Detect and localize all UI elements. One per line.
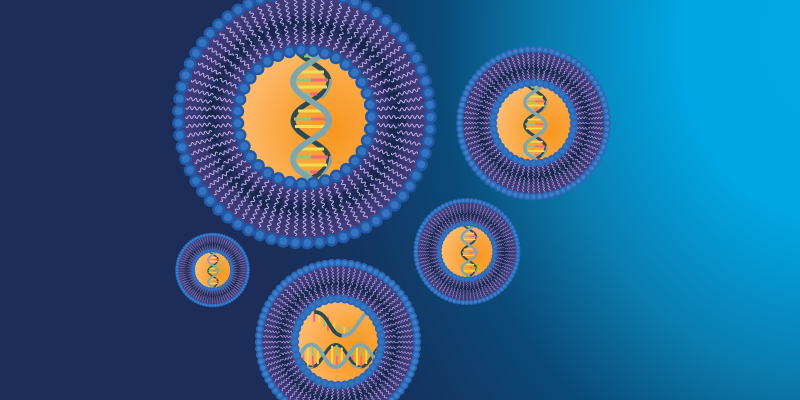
lipid head beads <box>460 49 607 197</box>
single-strand RNA <box>314 312 366 336</box>
vesicle: small left with DNA <box>177 234 248 306</box>
DNA double helix <box>462 221 477 285</box>
lipid bilayer and orange core <box>261 265 415 400</box>
lipid head beads <box>259 263 417 400</box>
lipid bilayer and orange core <box>178 236 247 304</box>
DNA double helix <box>293 42 330 198</box>
vesicle: middle right with DNA <box>416 200 518 303</box>
lipid bilayer and orange core <box>182 0 427 239</box>
vesicle: upper right with DNA <box>460 49 607 197</box>
vesicle: bottom with horizontal DNA and single strand <box>259 263 417 400</box>
horizontal DNA double helix <box>300 342 377 369</box>
DNA double helix <box>208 249 219 293</box>
DNA double helix <box>525 79 547 171</box>
lipid head beads <box>177 234 248 306</box>
lipid bilayer and orange core <box>462 51 605 195</box>
lipid head beads <box>416 200 518 303</box>
lipid head beads <box>178 0 430 243</box>
lipid bilayer and orange core <box>417 202 517 301</box>
vesicle: large with DNA <box>178 0 430 243</box>
